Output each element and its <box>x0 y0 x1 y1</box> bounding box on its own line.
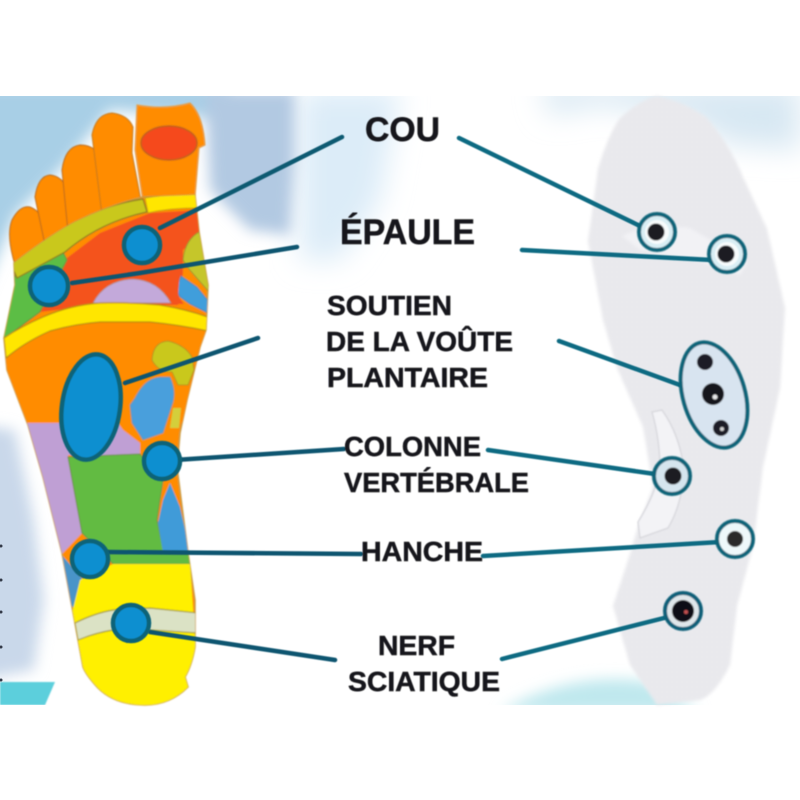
insole arch pad <box>638 410 684 538</box>
label: colonne vertébrale <box>344 431 529 498</box>
second toe <box>92 113 142 215</box>
foot marker: nerf sciatique <box>113 605 149 641</box>
label: soutien de la voûte plantaire: SOUTIEN <box>327 290 452 321</box>
foot marker: voûte plantaire <box>55 350 127 464</box>
insole <box>588 96 785 705</box>
fourth toe <box>35 175 70 245</box>
olive heel tip zone <box>170 408 181 428</box>
foot marker: colonne <box>144 443 180 479</box>
label: nerf sciatique <box>348 630 500 697</box>
insole marker: colonne <box>654 458 690 494</box>
insole marker: cou <box>639 214 675 250</box>
olive mid zone <box>152 341 194 385</box>
insole marker: hanche <box>717 521 753 557</box>
yellow toe band <box>145 194 197 213</box>
foot reflexology map <box>0 103 212 710</box>
forefoot red zone <box>40 210 200 312</box>
label: épaule: ÉPAULE <box>340 212 475 252</box>
foot marker: épaule <box>30 267 68 305</box>
light blue mid zone <box>130 377 174 440</box>
label: nerf sciatique: SCIATIQUE <box>348 666 500 697</box>
insole marker: épaule <box>709 236 745 272</box>
blue heel side <box>60 553 82 608</box>
sole base <box>4 195 208 705</box>
label: soutien de la voûte plantaire <box>326 290 513 393</box>
insole toe pad <box>622 226 748 275</box>
teal corner shape <box>0 682 55 705</box>
olive toe band <box>10 199 147 278</box>
label: colonne vertébrale: COLONNE <box>344 431 481 462</box>
foot marker: cou <box>124 227 160 263</box>
grey heel band <box>75 608 198 640</box>
yellow heel <box>72 562 196 706</box>
lilac waist <box>20 423 140 556</box>
green outer forefoot <box>4 252 68 338</box>
blue side zone <box>178 276 210 314</box>
labels <box>326 111 529 697</box>
big toe red oval <box>141 126 197 160</box>
foot marker: hanche <box>72 541 108 577</box>
green waist <box>68 454 190 564</box>
watercolor background <box>0 85 800 712</box>
orange mid sole <box>6 330 206 424</box>
label: soutien de la voûte plantaire: DE LA VOÛTE <box>326 325 513 357</box>
red right zone <box>176 280 184 304</box>
label: nerf sciatique: NERF <box>378 630 455 661</box>
big toe <box>135 103 205 202</box>
label: cou: COU <box>365 111 440 149</box>
label: soutien de la voûte plantaire: PLANTAIRE <box>327 362 488 393</box>
edge dots <box>0 544 2 682</box>
insole marker: nerf sciatique <box>665 593 701 629</box>
connector lines <box>72 137 720 660</box>
olive side zone <box>183 232 212 292</box>
third toe <box>62 145 104 232</box>
insole marker: voûte plantaire <box>669 335 759 455</box>
lilac arch dome <box>93 279 171 303</box>
label: hanche: HANCHE <box>361 536 483 567</box>
label: colonne vertébrale: VERTÉBRALE <box>344 467 529 498</box>
blue waist strip <box>158 483 190 552</box>
yellow arch band <box>4 303 208 358</box>
infographic canvas <box>0 96 800 707</box>
small toe <box>10 207 47 265</box>
